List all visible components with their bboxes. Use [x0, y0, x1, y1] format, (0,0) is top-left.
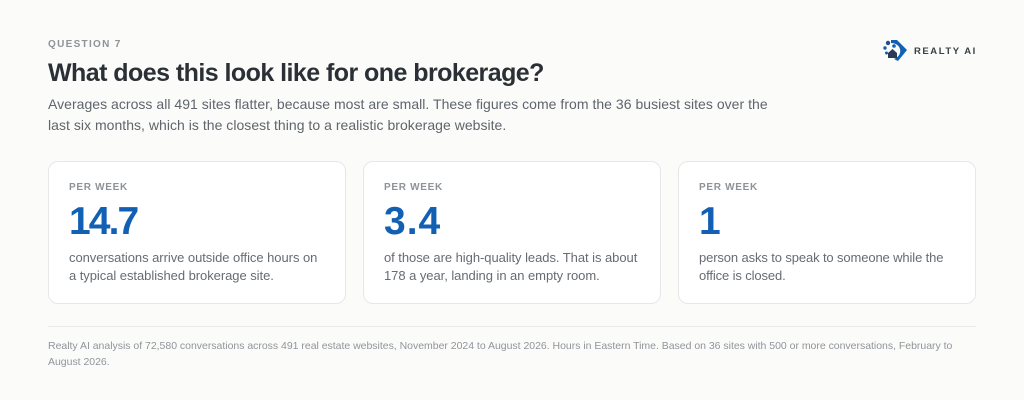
footnote: Realty AI analysis of 72,580 conversations across 491 real estate websites, November 2024 to August 2026. Hours in Eastern Time. Based on 36 sites with 500 or more conversations, February to	[48, 340, 952, 352]
description: office is closed.	[699, 268, 786, 283]
panel: stat 1	[678, 161, 976, 304]
intro text: last six months, which is the closest thing to a realistic brokerage website.	[48, 117, 506, 133]
title: What does this look like for one brokerage?	[48, 59, 544, 87]
label: per week: PER WEEK	[384, 182, 443, 193]
number: 1: 1	[699, 200, 721, 243]
label: per week: PER WEEK	[699, 182, 758, 193]
logo: Realty AI	[883, 40, 977, 61]
description	[384, 250, 638, 283]
panel: stat 14.7	[48, 161, 346, 304]
description: a typical established brokerage site.	[69, 268, 274, 283]
label: per week: PER WEEK	[69, 182, 128, 193]
number: 3.4: 3.4	[384, 200, 441, 243]
description: of those are high-quality leads. That is about	[384, 250, 637, 265]
eyebrow: question number: QUESTION 7	[48, 39, 122, 50]
description: person asks to speak to someone while the	[699, 250, 943, 265]
description: 178 a year, landing in an empty room.	[384, 268, 600, 283]
footnote: August 2026.	[48, 356, 110, 368]
intro text: Averages across all 491 sites flatter, because most are small. These figures come from the 36 busiest sites over the	[48, 96, 768, 112]
logo: Realty AI: REALTY AI	[914, 46, 977, 57]
panel: stat 3.4	[363, 161, 661, 304]
description	[699, 250, 943, 283]
description: conversations arrive outside office hours on	[69, 250, 317, 265]
footnote	[48, 340, 952, 368]
description	[69, 250, 317, 283]
intro text	[48, 96, 768, 133]
number: 14.7: 14.7	[69, 200, 137, 243]
